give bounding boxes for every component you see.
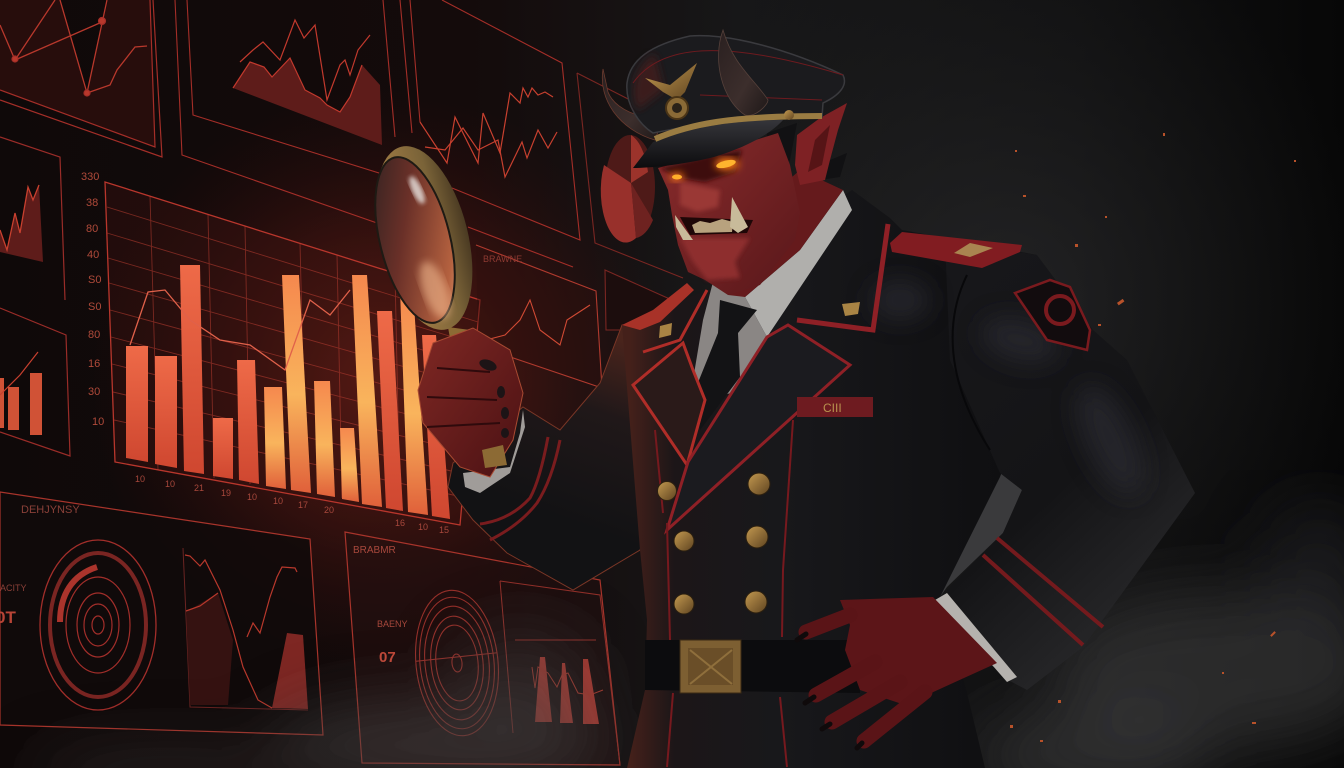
smoke: [30, 500, 1344, 768]
tusks: [730, 197, 748, 233]
y axis labels: [81, 171, 104, 428]
radar gauge: [409, 586, 505, 740]
panel: pie chart: [577, 73, 683, 278]
x axis labels: 10: [135, 474, 145, 484]
panel: left small chart: [0, 137, 65, 300]
x axis labels: 19: [221, 488, 231, 498]
small spike chart: [500, 581, 620, 765]
pie slices: [601, 135, 655, 243]
panel: bottom centre gauge and charts: BRABMR: [353, 545, 396, 556]
y axis labels: S0: [88, 301, 101, 313]
name tag: CIII: [823, 401, 842, 415]
neck and head: [658, 103, 847, 297]
y axis labels: 80: [86, 223, 98, 235]
x axis labels: 10: [418, 522, 428, 532]
magnifying glass: [359, 136, 489, 350]
glowing eyes: [670, 158, 739, 181]
gauge: [40, 540, 156, 710]
y axis labels: 30: [88, 386, 100, 398]
x axis labels: 17: [298, 500, 308, 510]
panel: bottom left gauge and chart: DEHJYNSY: [21, 504, 80, 516]
mouth and teeth: [680, 217, 753, 235]
y axis labels: 16: [88, 358, 100, 370]
x axis labels: 21: [194, 483, 204, 493]
x axis labels: 10: [165, 479, 175, 489]
panel: top centre area chart: [175, 0, 395, 223]
panel: small right chart: [605, 270, 672, 330]
x axis labels: 15: [439, 525, 449, 535]
grey gap between arm and torso: [940, 473, 1022, 597]
panel: bottom centre gauge and charts: [345, 532, 620, 765]
right hand on hip: [797, 597, 997, 748]
panel: stock line chart behind lens: BRAWNE: [483, 254, 522, 264]
y axis labels: 10: [92, 416, 104, 428]
x axis labels: 16: [395, 518, 405, 528]
panel: bottom centre gauge and charts: 07: [379, 649, 396, 666]
far arm and sleeve: [448, 320, 690, 590]
belt and buckle: [645, 640, 860, 693]
epaulette: [890, 232, 1022, 268]
lapels with red piping: [633, 224, 888, 530]
brow: [660, 150, 742, 182]
lips and chin: [680, 238, 750, 280]
coat seams: [655, 420, 793, 767]
nose: [680, 182, 720, 212]
chart grid: [107, 196, 478, 511]
left epaulette: [622, 283, 694, 330]
panel: bottom left gauge and chart: ACITY: [0, 583, 27, 593]
bars: [126, 265, 450, 519]
near arm and shoulder: [870, 240, 1195, 690]
area line chart: [183, 548, 308, 710]
y axis labels: S0: [88, 274, 101, 286]
sleeve fold highlights: [870, 280, 1158, 505]
left hand holding glass: [418, 328, 523, 477]
panel: bottom left gauge and chart: [0, 492, 323, 735]
y axis labels: 40: [87, 249, 99, 261]
trend line: [130, 290, 350, 370]
officer cap: [602, 30, 844, 168]
shoulder patch: [1015, 280, 1090, 350]
y axis labels: 38: [86, 197, 98, 209]
x axis labels: 10: [247, 492, 257, 502]
x axis labels: 20: [324, 505, 334, 515]
coat torso: [622, 190, 1037, 768]
x axis labels: [135, 474, 449, 535]
hair: [765, 123, 797, 190]
x axis labels: 10: [273, 496, 283, 506]
gold buttons: [658, 473, 770, 614]
panel: bottom centre gauge and charts: BAENY: [377, 619, 408, 629]
y axis labels: 80: [88, 329, 100, 341]
sparks: [1010, 133, 1296, 742]
panel: main bar chart: [81, 171, 480, 535]
panel: stock line chart behind lens: [476, 245, 602, 388]
panel: top left line chart: [0, 0, 162, 157]
collar badges: [659, 302, 860, 338]
shirt and tie: [693, 190, 852, 430]
panel: left small bar chart: [0, 308, 70, 456]
panel: top right line chart: [400, 0, 580, 267]
y axis labels: 330: [81, 171, 99, 183]
name tag: [797, 397, 873, 417]
face: [658, 133, 800, 295]
ear: [795, 103, 847, 185]
figure: demon officer: [359, 30, 1195, 768]
